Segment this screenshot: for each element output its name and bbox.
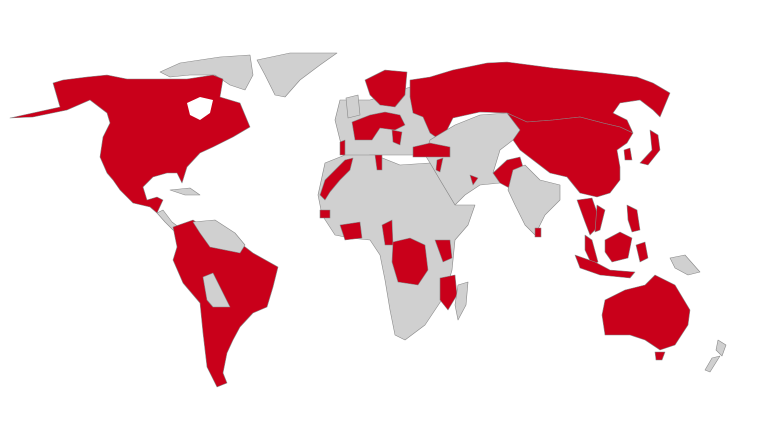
region: north america bbox=[10, 75, 250, 213]
region: arctic islands bbox=[160, 55, 253, 90]
region: australia bbox=[602, 275, 690, 360]
region: russia bbox=[410, 62, 670, 140]
region: central america bbox=[157, 188, 200, 232]
region: middle east and central asia bbox=[413, 113, 523, 205]
region: southeast asia bbox=[575, 198, 700, 278]
region: europe bbox=[335, 70, 440, 160]
region: south america bbox=[173, 220, 278, 387]
region: india bbox=[508, 165, 560, 237]
region: china bbox=[507, 113, 660, 197]
region: new zealand bbox=[705, 340, 726, 372]
region: africa bbox=[318, 155, 475, 340]
region: greenland bbox=[257, 53, 337, 97]
